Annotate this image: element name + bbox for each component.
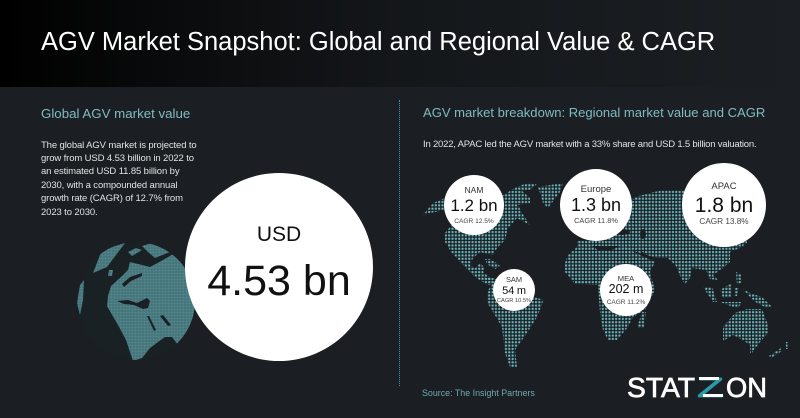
- heading: regional: AGV market breakdown: Regional market value and CAGR: [423, 105, 765, 120]
- MEA value: 202 m: [609, 282, 643, 296]
- Europe name: Europe: [581, 184, 611, 195]
- logo: Statzon: [627, 372, 767, 402]
- value: 4.53 bn: 4.53 bn: [207, 257, 351, 305]
- divider: [399, 100, 400, 386]
- label: USD: USD: [257, 223, 301, 246]
- header band: [0, 0, 800, 87]
- callout: Europe: [560, 169, 632, 241]
- Europe value: 1.3 bn: [571, 195, 621, 215]
- SAM CAGR: CAGR 10.5%: [497, 298, 531, 304]
- inland seas: [592, 229, 648, 258]
- heading: global: Global AGV market value: [41, 106, 190, 121]
- SAM name: SAM: [506, 275, 522, 284]
- APAC name: APAC: [711, 181, 737, 192]
- continents: [423, 183, 788, 367]
- callout: SAM: [493, 269, 535, 311]
- SAM value: 54 m: [502, 285, 526, 297]
- APAC CAGR: CAGR 13.8%: [699, 217, 749, 226]
- text block: global description: an estimated USD 11.85 billion by: [41, 166, 179, 177]
- callout: NAM: [444, 175, 504, 235]
- panel: global market value: [41, 106, 197, 218]
- icon: dotted globe: [77, 243, 194, 360]
- MEA name: MEA: [618, 274, 634, 283]
- callout: MEA: [600, 264, 652, 316]
- text block: regional description: In 2022, APAC led the AGV market with a 33% share and USD 1.5 billion valuation.: [423, 139, 756, 150]
- APAC value: 1.8 bn: [695, 194, 753, 217]
- world dot map: [423, 183, 788, 367]
- callout: USD 4.53 bn: [185, 173, 373, 361]
- text block: global description: grow from USD 4.53 billion in 2022 to: [41, 153, 194, 164]
- Europe CAGR: CAGR 11.8%: [574, 216, 618, 225]
- text block: global description: [41, 140, 197, 218]
- source note: Source: The Insight Partners: [422, 388, 535, 398]
- NAM name: NAM: [465, 185, 483, 195]
- seas: [117, 273, 171, 331]
- NAM value: 1.2 bn: [450, 196, 498, 215]
- MEA CAGR: CAGR 11.2%: [607, 299, 645, 306]
- land: [77, 243, 205, 361]
- text block: global description: 2030, with a compounded annual: [41, 180, 177, 191]
- text block: global description: 2023 to 2030.: [41, 207, 98, 218]
- title: AGV Market Snapshot: Global and Regional Value & CAGR: [41, 28, 715, 56]
- text block: global description: growth rate (CAGR) of 12.7% from: [41, 193, 183, 204]
- NAM CAGR: CAGR 12.5%: [454, 218, 494, 225]
- callout: APAC: [682, 163, 766, 247]
- text block: global description: The global AGV market is projected to: [41, 140, 197, 150]
